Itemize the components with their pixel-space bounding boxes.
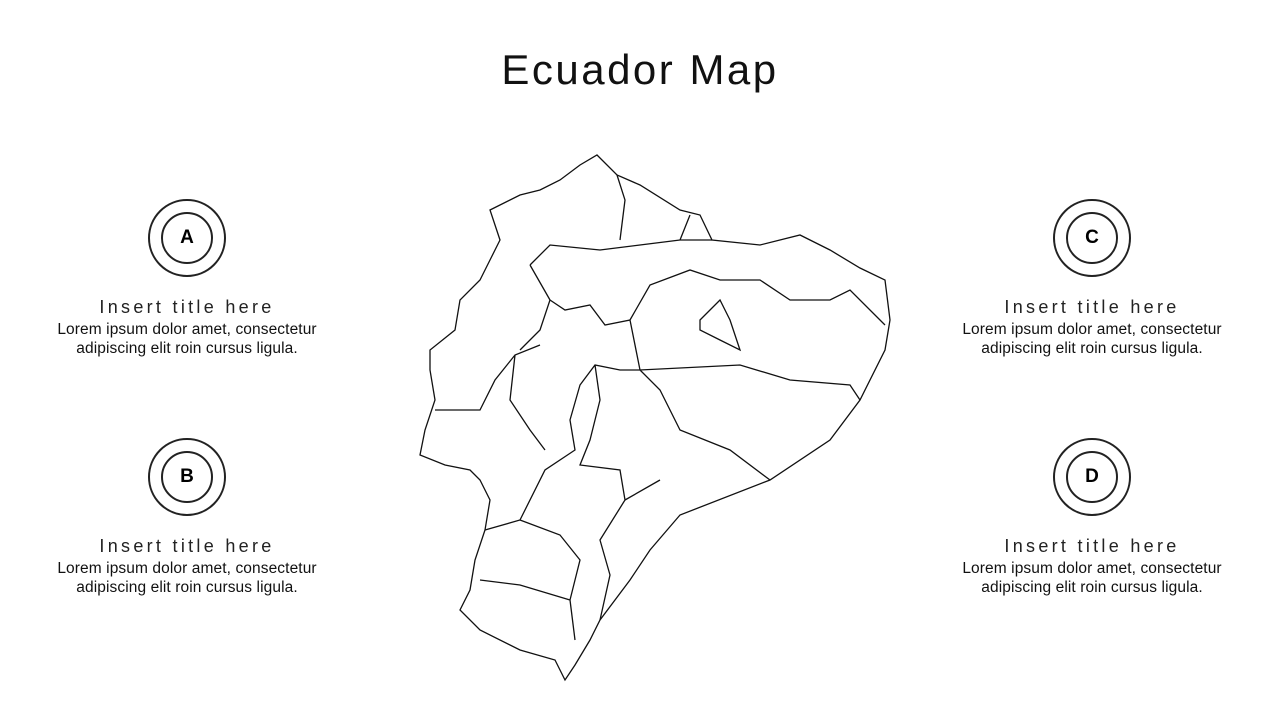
item A: adipiscing elit roin cursus ligula. [76,340,298,357]
item C: Lorem ipsum dolor amet, consectetur [962,321,1222,338]
item A: Insert title here [99,297,275,317]
item D: adipiscing elit roin cursus ligula. [981,579,1203,596]
item C: Insert title here [1004,297,1180,317]
item A [57,199,317,357]
item C [962,199,1222,357]
item B: B [180,466,194,487]
item D: Insert title here [1004,536,1180,556]
title: Ecuador Map [501,46,779,93]
item A: A [180,227,194,248]
item B: Lorem ipsum dolor amet, consectetur [57,560,317,577]
item D: Lorem ipsum dolor amet, consectetur [962,560,1222,577]
item A: Lorem ipsum dolor amet, consectetur [57,321,317,338]
item B [57,438,317,596]
item B: Insert title here [99,536,275,556]
item D: D [1085,466,1099,487]
item D [962,438,1222,596]
item C: C [1085,227,1099,248]
item B: adipiscing elit roin cursus ligula. [76,579,298,596]
item C: adipiscing elit roin cursus ligula. [981,340,1203,357]
